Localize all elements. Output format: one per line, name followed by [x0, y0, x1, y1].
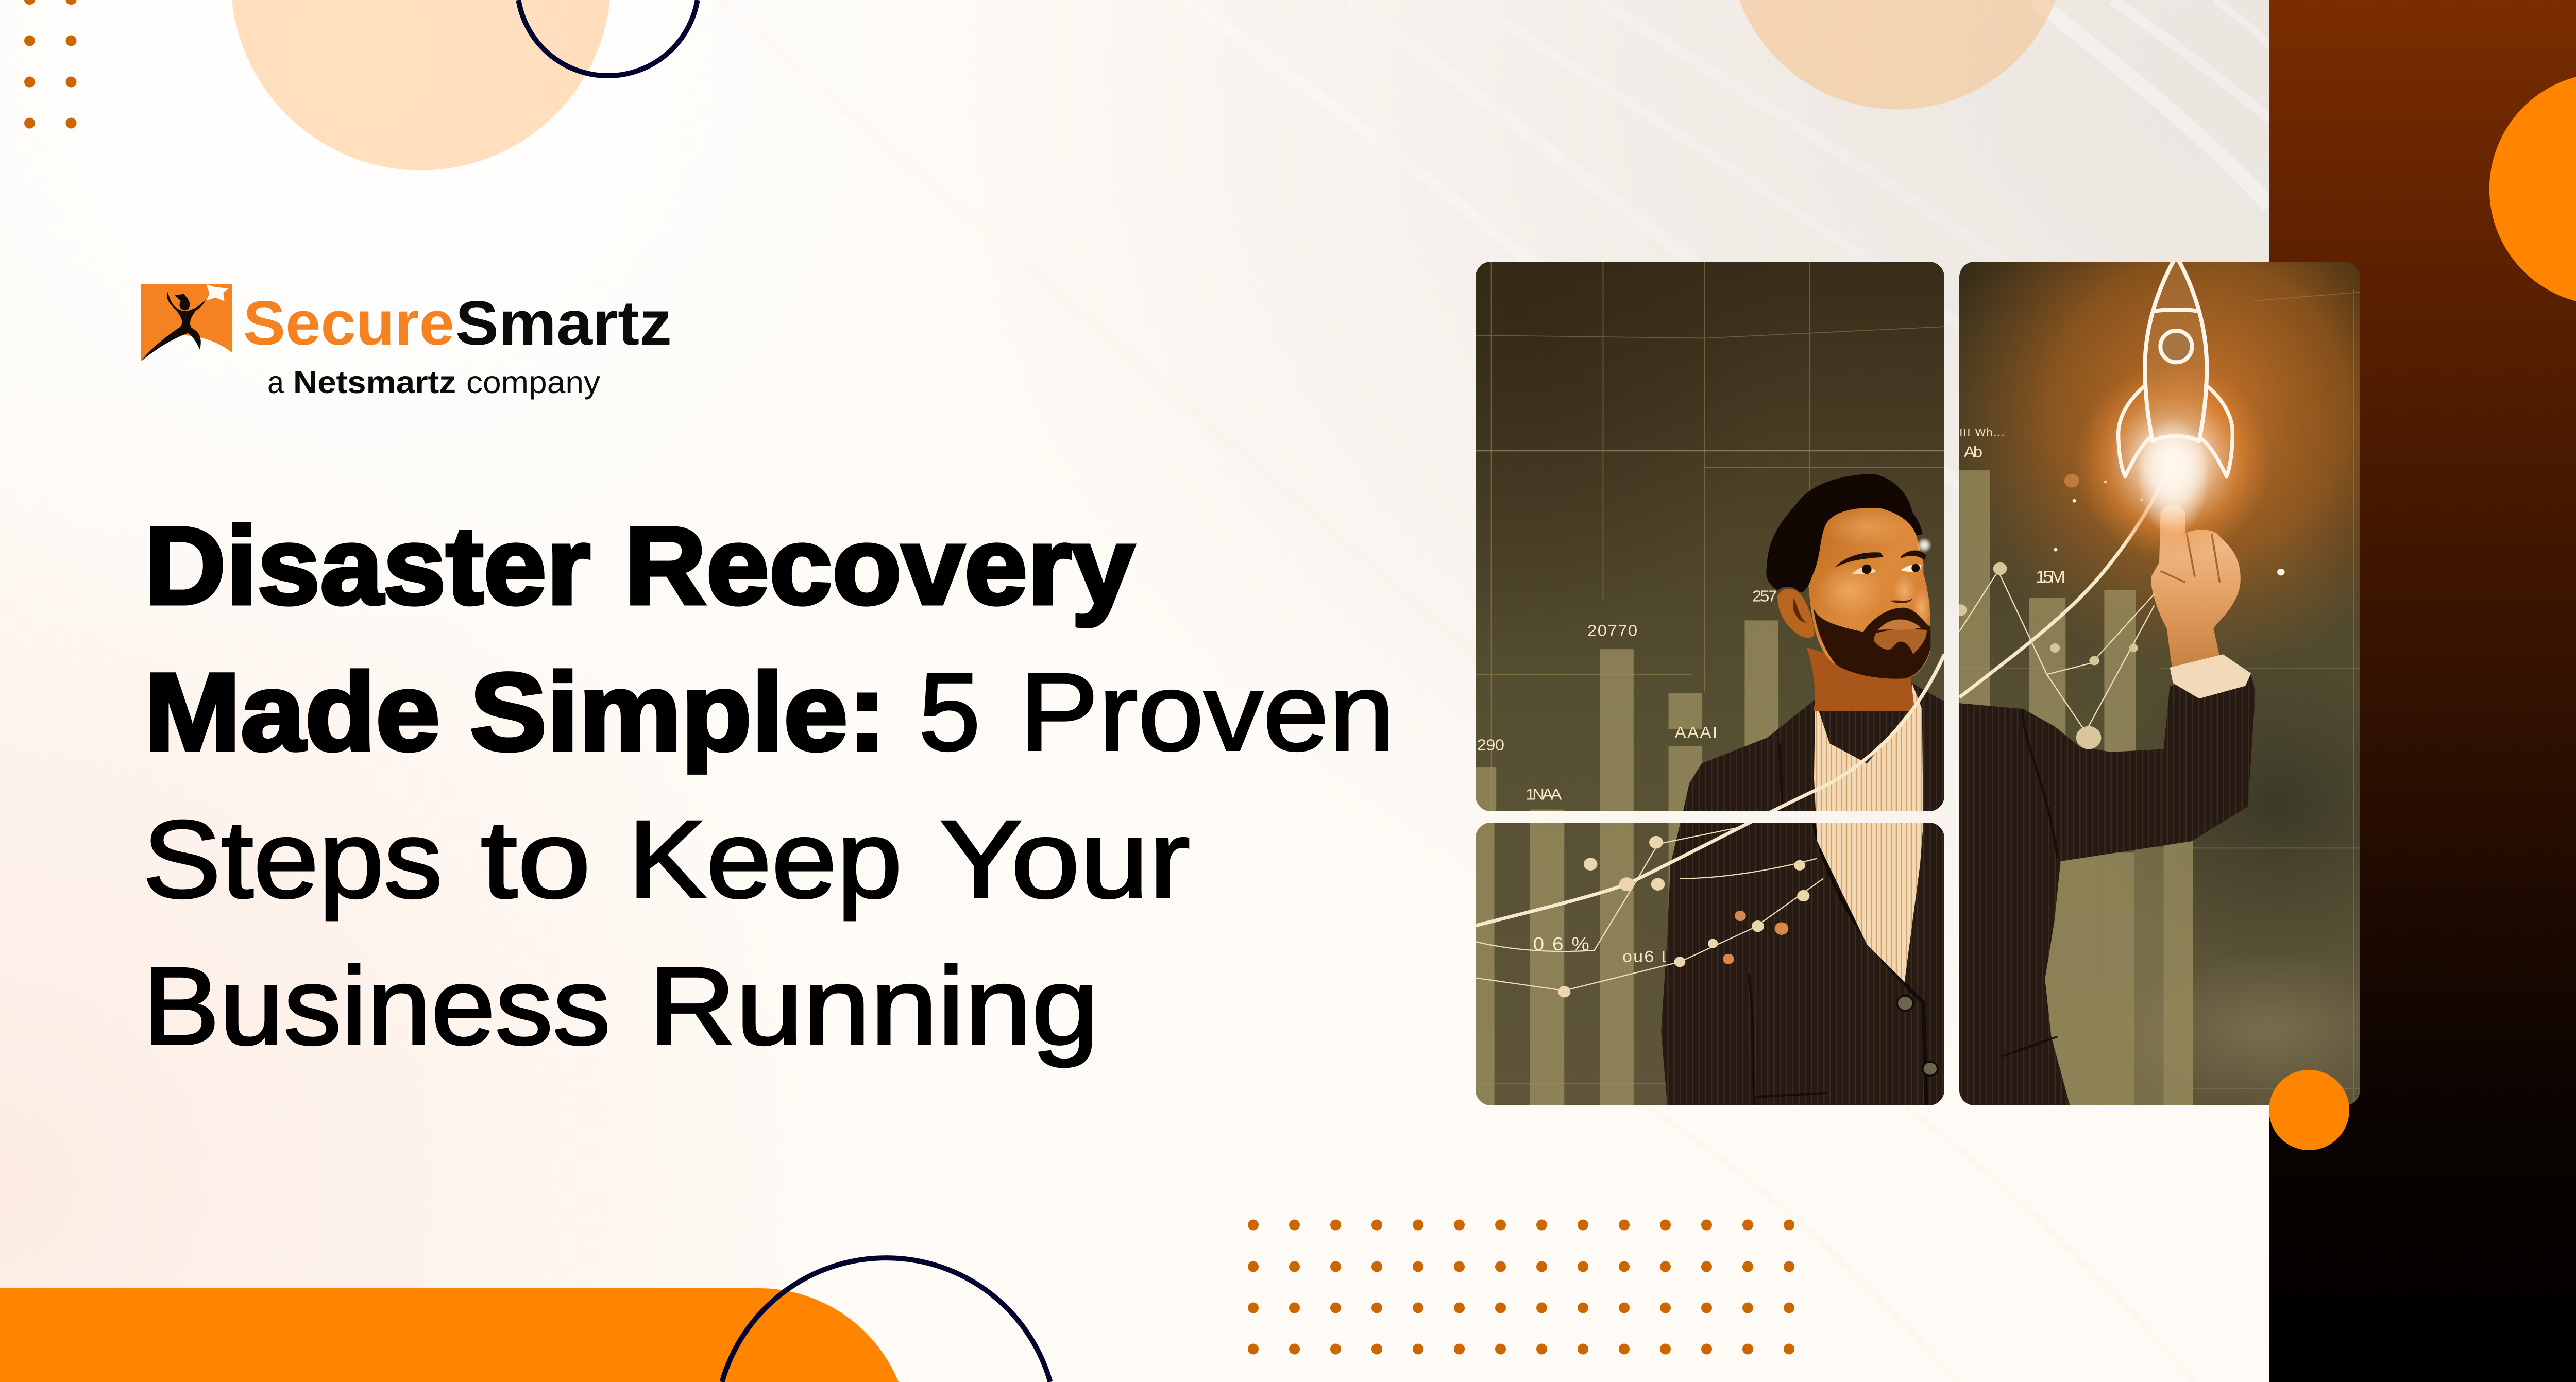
title line 1 — [144, 504, 1134, 627]
neck — [1807, 647, 1915, 711]
chart bars — [1476, 470, 2193, 1105]
orange circle on dark column — [2489, 77, 2576, 301]
chart lines over figure, zoom coords — [1476, 462, 2285, 998]
chart number labels: Ab — [1964, 443, 1982, 460]
man: shirt — [1811, 683, 1926, 982]
title line 1: Disaster — [144, 505, 590, 627]
chart and figure, zoom coords — [1476, 262, 2360, 1105]
eyes — [1852, 564, 1922, 574]
chart number labels: 06% — [1533, 933, 1589, 954]
title line 2: 5 — [919, 651, 980, 774]
title line 2: Proven — [1020, 651, 1395, 774]
dot grid top left — [24, 0, 76, 129]
photo backdrop — [1476, 262, 2360, 1105]
secondary lines — [1476, 571, 2154, 991]
beard — [1814, 608, 1930, 679]
rocket right fin — [2200, 387, 2232, 476]
pointing finger glow — [2137, 417, 2209, 536]
face — [1808, 508, 1930, 678]
logo mark — [141, 284, 232, 362]
title line 2 — [144, 651, 1395, 774]
logo tagline: Netsmartz — [293, 365, 456, 400]
title line 1: Recovery — [624, 505, 1134, 627]
logo tagline: a — [267, 365, 284, 400]
logo tagline — [267, 365, 601, 400]
small orange circle — [2269, 1070, 2349, 1150]
rocket glow — [2071, 361, 2277, 561]
chart number labels: AAAI — [1675, 724, 1717, 741]
chart number labels: 290 — [1477, 737, 1504, 754]
chart number labels: 15M — [2036, 567, 2065, 586]
navy ring bottom — [722, 1258, 1050, 1382]
man: head, zoom coords — [1766, 474, 1932, 711]
title line 2: Made — [144, 651, 440, 774]
title line 2: Simple: — [470, 651, 886, 774]
chart number labels: ou6 LU — [1622, 947, 1685, 965]
face highlights — [1817, 506, 1931, 628]
navy ring top — [518, 0, 698, 76]
chart number labels — [1477, 427, 2065, 965]
orange footer shape — [0, 1288, 899, 1382]
chart number labels: III Wh... — [1959, 427, 2005, 438]
man: raised hand — [2151, 505, 2241, 680]
hair — [1766, 474, 1923, 592]
chin and lips — [1874, 620, 1927, 654]
title line 3: Steps — [143, 798, 443, 921]
floating light orb — [1917, 537, 1932, 553]
rocket nose band — [2154, 310, 2199, 311]
photo panels — [1476, 262, 2360, 1105]
man: shirt cuff — [2170, 654, 2251, 698]
title line 4: Running — [649, 945, 1099, 1068]
title — [143, 505, 1395, 1068]
eyebrows — [1835, 550, 1926, 568]
man: jacket — [1655, 674, 2260, 1105]
logo wordmark: Smartz — [455, 288, 672, 358]
logo wordmark: Secure — [243, 288, 454, 358]
logo tagline: company — [466, 365, 601, 400]
title line 4 — [143, 945, 1099, 1068]
title line 3: Keep — [628, 798, 902, 921]
logo — [141, 284, 672, 400]
title line 3: to — [481, 798, 591, 921]
background streaks — [721, 0, 2269, 1382]
main growth line — [1476, 462, 2172, 926]
man: jacket shading — [1749, 709, 2058, 1105]
chart number labels: 257 — [1752, 588, 1777, 605]
logo wordmark — [243, 288, 672, 358]
ear — [1777, 589, 1815, 638]
man: jacket buttons — [1897, 996, 1938, 1076]
rocket window — [2160, 331, 2192, 362]
rocket body — [2145, 256, 2207, 441]
grid lines — [1476, 262, 2360, 1105]
title line 3: Your — [940, 798, 1190, 921]
chart number labels: 20770 — [1587, 622, 1637, 639]
title line 4: Business — [143, 945, 611, 1068]
peach circle top right — [1739, 0, 2056, 110]
title line 3 — [143, 798, 1190, 921]
chart nodes — [1558, 474, 2285, 998]
dot grid bottom — [1248, 1220, 1794, 1355]
rocket icon — [2119, 256, 2232, 476]
dark right column — [2269, 0, 2576, 1382]
chart number labels: 1NAA — [1526, 786, 1562, 803]
nose shadow — [1890, 599, 1912, 603]
peach circle top left — [232, 0, 610, 170]
rocket left fin — [2119, 387, 2151, 476]
